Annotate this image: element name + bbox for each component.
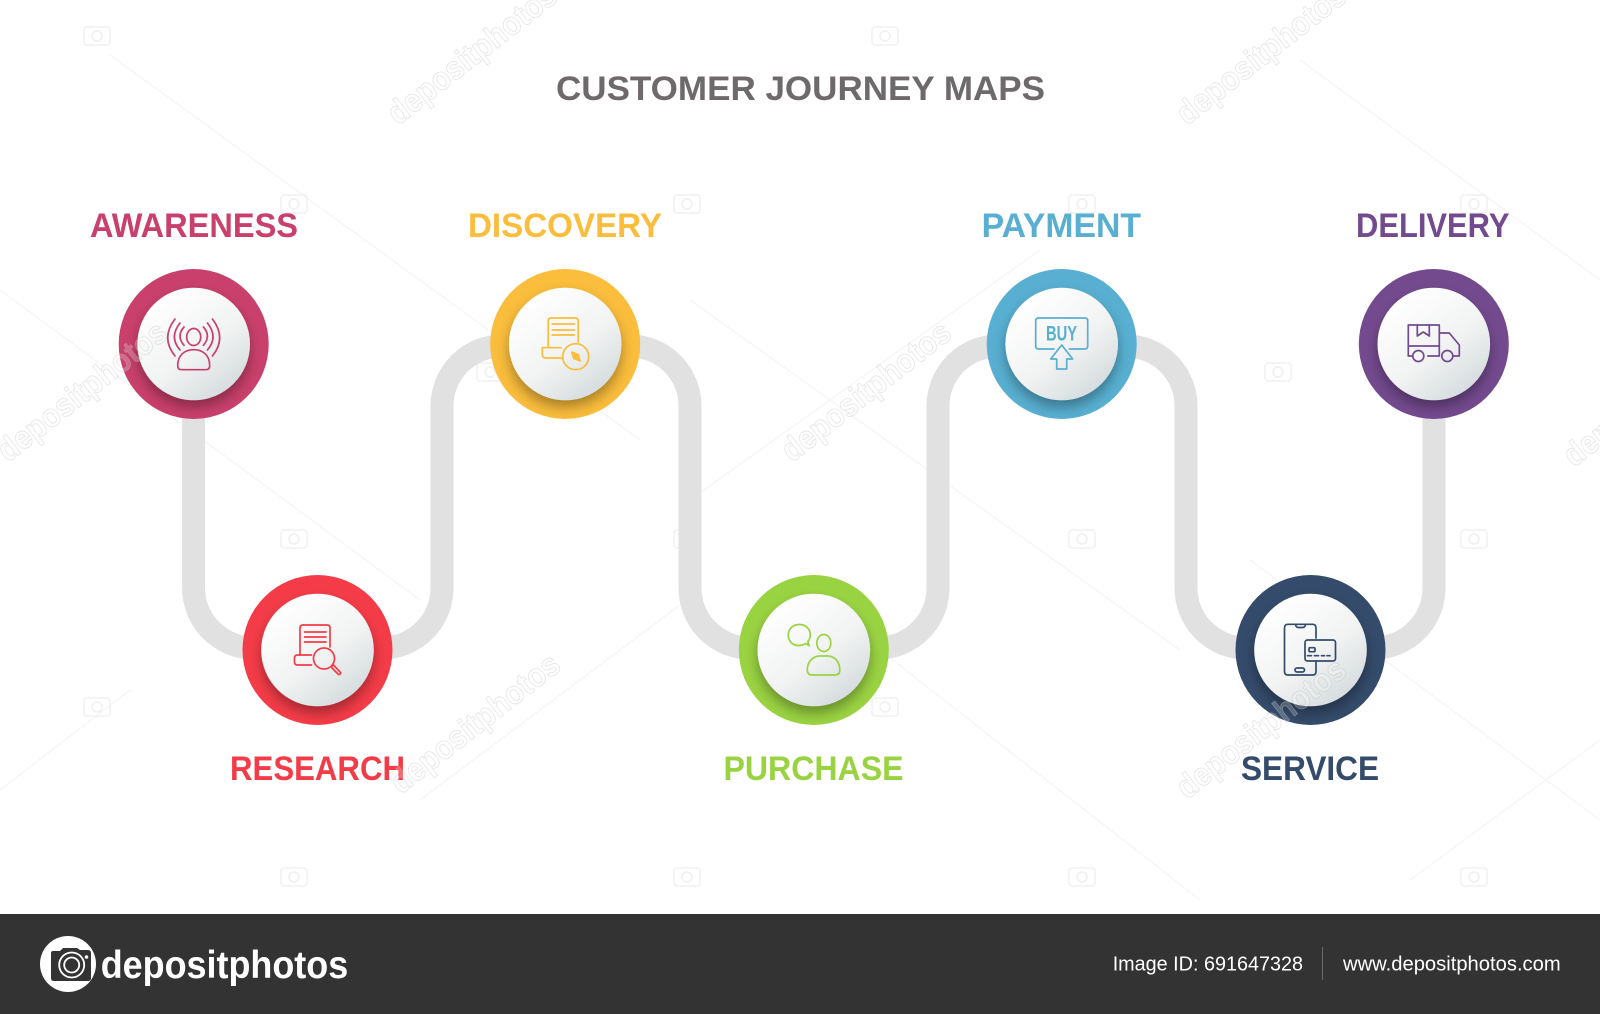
logo: wordmark: depositphotos — [101, 944, 348, 987]
ring: delivery — [1359, 269, 1509, 419]
icon: person broadcasting — [168, 319, 220, 370]
label: purchase: PURCHASE — [724, 750, 904, 788]
step: payment — [982, 207, 1141, 419]
label: discovery: DISCOVERY — [468, 207, 662, 245]
step: service — [1236, 575, 1386, 788]
icon: buy button with arrow — [1036, 318, 1088, 369]
disc: awareness — [137, 288, 250, 400]
text: depositphotos — [1169, 650, 1353, 806]
ring: service — [1236, 575, 1386, 725]
icon: document with magnifier — [294, 625, 341, 674]
disc: research — [261, 594, 374, 706]
icon: customer with speech bubble — [788, 624, 840, 675]
footer bar — [0, 914, 1600, 1014]
disc: service — [1254, 594, 1367, 706]
icon: phone and card — [1284, 624, 1336, 675]
ring: discovery — [490, 269, 640, 419]
ring: payment — [987, 269, 1137, 419]
text: depositphotos — [383, 645, 567, 801]
winding grey path — [194, 346, 1434, 648]
label: awareness: AWARENESS — [90, 207, 298, 245]
disc: purchase — [758, 594, 870, 706]
website: www.depositphotos.com — [1342, 953, 1561, 976]
image id: Image ID: 691647328 — [1113, 953, 1303, 976]
text: depositphotos — [774, 313, 958, 469]
label: delivery: DELIVERY — [1356, 207, 1510, 245]
step: research — [230, 575, 405, 788]
ring: awareness — [119, 269, 269, 419]
step: discovery — [468, 207, 662, 419]
logo: camera badge — [40, 936, 96, 992]
icon: document with compass — [542, 318, 589, 370]
label: payment: PAYMENT — [982, 207, 1141, 245]
disc: payment — [1005, 288, 1118, 400]
disc: discovery — [509, 288, 622, 400]
icon: delivery truck — [1408, 325, 1459, 362]
step: purchase — [724, 575, 904, 788]
ring: purchase — [739, 575, 889, 725]
step: awareness — [90, 207, 298, 419]
label: research: RESEARCH — [230, 750, 405, 788]
step: delivery — [1356, 207, 1510, 419]
label: service: SERVICE — [1241, 750, 1379, 788]
icon: buy button with arrow: BUY — [1046, 323, 1077, 346]
title: CUSTOMER JOURNEY MAPS — [556, 70, 1045, 108]
ring: research — [242, 575, 392, 725]
disc: delivery — [1378, 288, 1490, 400]
